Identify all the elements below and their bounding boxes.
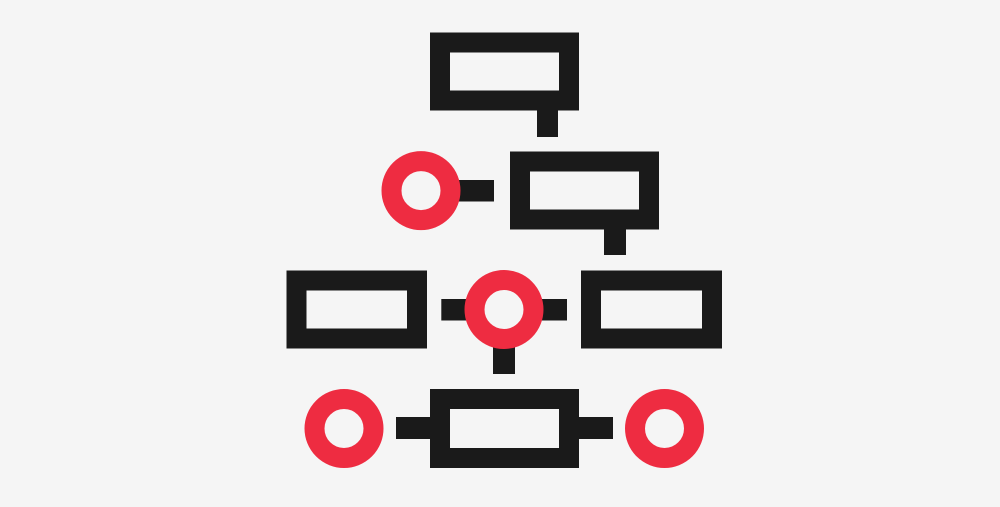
connector: second row circle to box — [455, 180, 494, 202]
connector: third row left — [441, 299, 471, 320]
box: third row right — [591, 280, 712, 338]
circle: bottom right — [635, 399, 694, 458]
circle: third row centre — [474, 280, 534, 339]
connector: second box to third row — [604, 229, 626, 255]
connector: third row right — [537, 299, 567, 320]
box: top — [440, 42, 569, 100]
connector: top box to second box — [537, 110, 558, 137]
connector: third row down — [493, 342, 515, 374]
connector: bottom left — [396, 417, 436, 439]
box: bottom — [440, 399, 569, 458]
circle: second row — [392, 161, 450, 220]
circle: bottom left — [314, 399, 374, 458]
box: third row left — [296, 280, 417, 338]
box: second row — [520, 162, 649, 220]
connector: bottom right — [573, 417, 613, 439]
